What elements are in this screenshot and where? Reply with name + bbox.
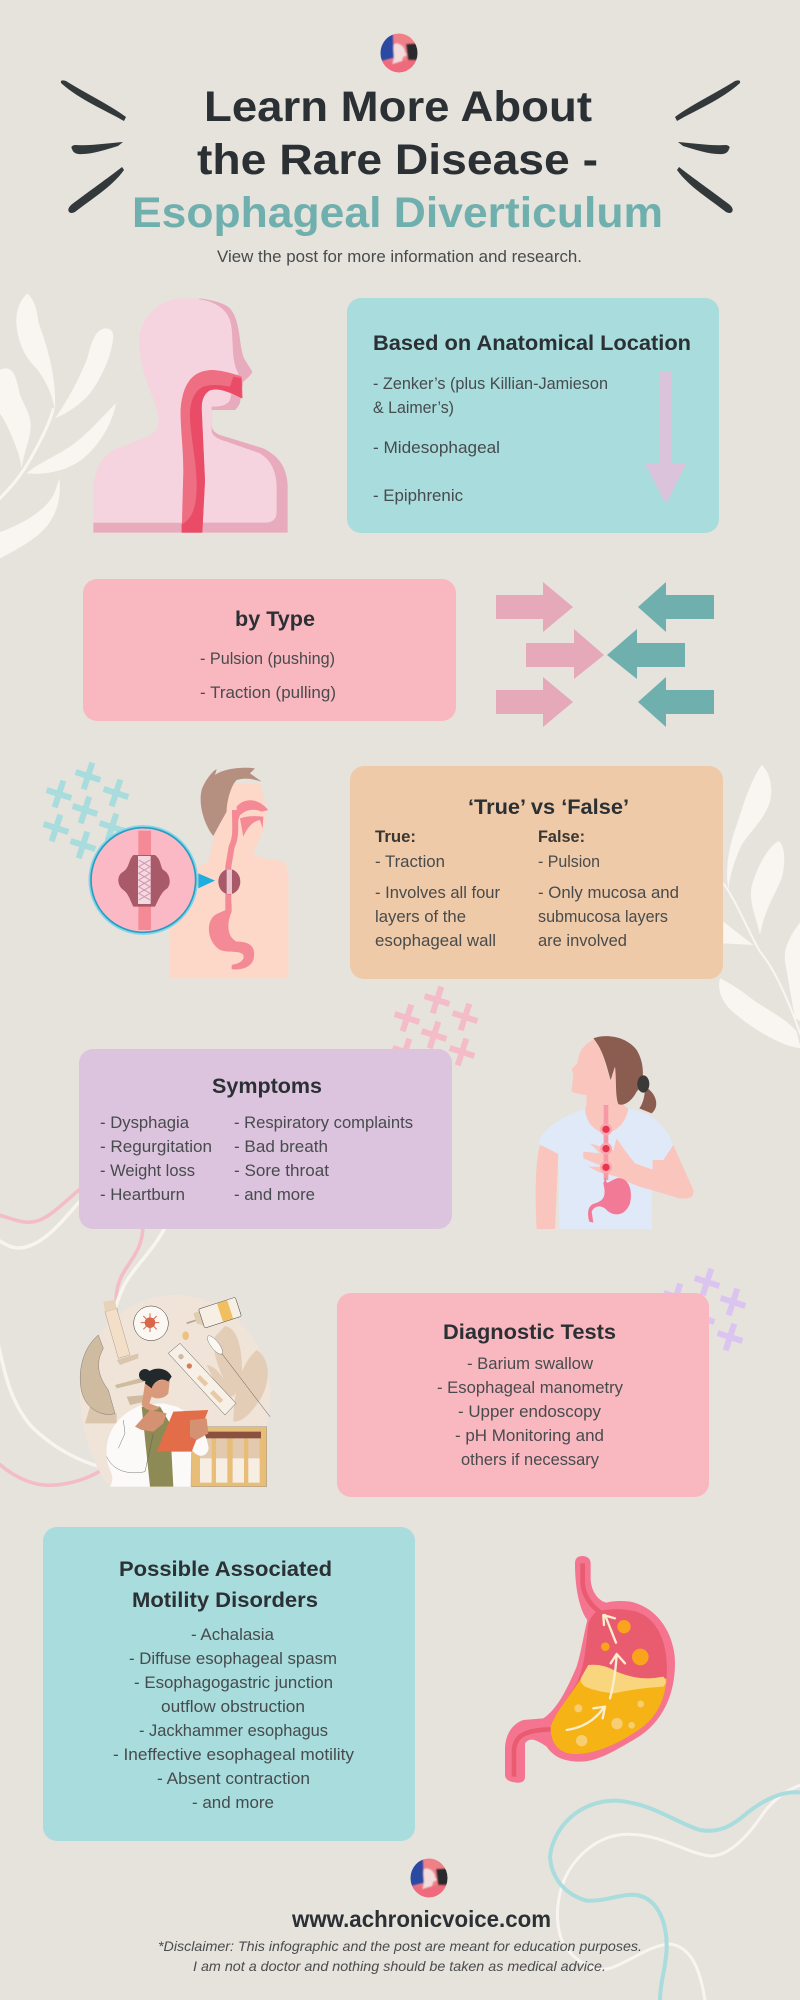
list: symptoms right: - Sore throat [234,1162,329,1180]
list: types: - Traction (pulling) [200,684,336,702]
illustration: stomach with reflux [505,1556,675,1783]
title: Esophageal Diverticulum [132,189,663,237]
disclaimer: I am not a doctor and nothing should be taken as medical advice. [193,1958,606,1974]
heading: symptoms: Symptoms [212,1075,322,1098]
burst strokes right [675,80,740,213]
list: symptoms left: - Weight loss [100,1162,195,1180]
decorative leaf left [0,293,116,560]
heading: diagnostic tests: Diagnostic Tests [443,1321,616,1344]
list: disorders: outflow obstruction [161,1698,305,1716]
heading: by type: by Type [235,608,315,631]
list: disorders: - Achalasia [191,1626,275,1644]
decorative teal crosses [39,759,133,862]
heading: true vs false: ‘True’ vs ‘False’ [468,796,629,819]
heading: motility disorders: Motility Disorders [132,1589,318,1612]
disclaimer [158,1938,642,1974]
list: tests: - Upper endoscopy [458,1403,602,1421]
list: tests: others if necessary [461,1451,600,1469]
decorative curved lines, left [0,1185,166,1485]
logo top [380,34,418,72]
logo bottom [410,1858,448,1898]
panel: by type [83,579,456,721]
panel: diagnostic tests [337,1293,709,1497]
illustration: head and esophagus bust [93,298,288,533]
list: types: - Pulsion (pushing) [200,650,335,668]
list: symptoms left: - Regurgitation [100,1138,212,1156]
list: tests: - pH Monitoring and [455,1427,604,1445]
panel: motility disorders [43,1527,415,1841]
list: symptoms left: - Heartburn [100,1186,185,1204]
list: disorders: - and more [192,1794,274,1812]
panel: symptoms [79,1049,452,1229]
column: true [375,828,501,950]
burst strokes left [61,80,126,213]
title: Learn More About [204,83,592,131]
list: disorders: - Jackhammer esophagus [139,1722,328,1740]
list: tests [437,1355,624,1469]
decorative pink crosses [388,983,482,1069]
column: false [538,828,679,950]
heading: anatomical location: Based on Anatomical Location [373,332,691,355]
list: symptoms right [234,1114,413,1204]
arrows: pulsion and traction [496,582,714,727]
decorative curved lines, bottom right [550,1785,800,2000]
list: symptoms right: - Respiratory complaints [234,1114,413,1132]
column: true: layers of the [375,908,466,926]
panel: anatomical location [347,298,719,533]
subtitle: View the post for more information and research. [217,248,582,266]
column: true: - Involves all four [375,884,501,902]
list: locations [373,375,608,505]
column: false: - Only mucosa and [538,884,679,902]
column: false: False: [538,828,585,846]
heading: motility disorders [119,1558,332,1612]
list: tests: - Esophageal manometry [437,1379,624,1397]
illustration: woman with chest symptoms [536,1036,693,1229]
list: disorders [113,1626,355,1812]
list: symptoms right: - Bad breath [234,1138,328,1156]
list: symptoms left [100,1114,212,1204]
list: tests: - Barium swallow [467,1355,593,1373]
list: locations: - Epiphrenic [373,487,463,505]
decorative leaf right [719,765,800,1048]
list: locations: & Laimer’s) [373,399,454,417]
list: locations: - Zenker’s (plus Killian-Jamieson [373,375,608,393]
illustration: doctor with diagnostic tools [80,1295,270,1487]
list: disorders: - Diffuse esophageal spasm [129,1650,337,1668]
disclaimer: *Disclaimer: This infographic and the post are meant for education purposes. [158,1938,642,1954]
panel: true vs false [350,766,723,979]
list: locations: - Midesophageal [373,439,500,457]
list: disorders: - Ineffective esophageal motility [113,1746,355,1764]
illustration: man with diverticulum and magnifier [90,768,288,978]
arrow: downward [645,372,686,504]
column: false: submucosa layers [538,908,668,926]
website url: www.achronicvoice.com [291,1906,551,1932]
list: types [200,650,336,702]
list: disorders: - Absent contraction [157,1770,310,1788]
heading: motility disorders: Possible Associated [119,1558,332,1581]
list: symptoms left: - Dysphagia [100,1114,190,1132]
column: true: True: [375,828,416,846]
title: the Rare Disease - [197,136,598,184]
title [132,83,663,237]
column: false: are involved [538,932,627,950]
column: true: - Traction [375,853,445,871]
list: symptoms right: - and more [234,1186,315,1204]
column: false: - Pulsion [538,853,600,871]
list: disorders: - Esophagogastric junction [134,1674,333,1692]
decorative purple crosses [659,1265,750,1354]
column: true: esophageal wall [375,932,496,950]
